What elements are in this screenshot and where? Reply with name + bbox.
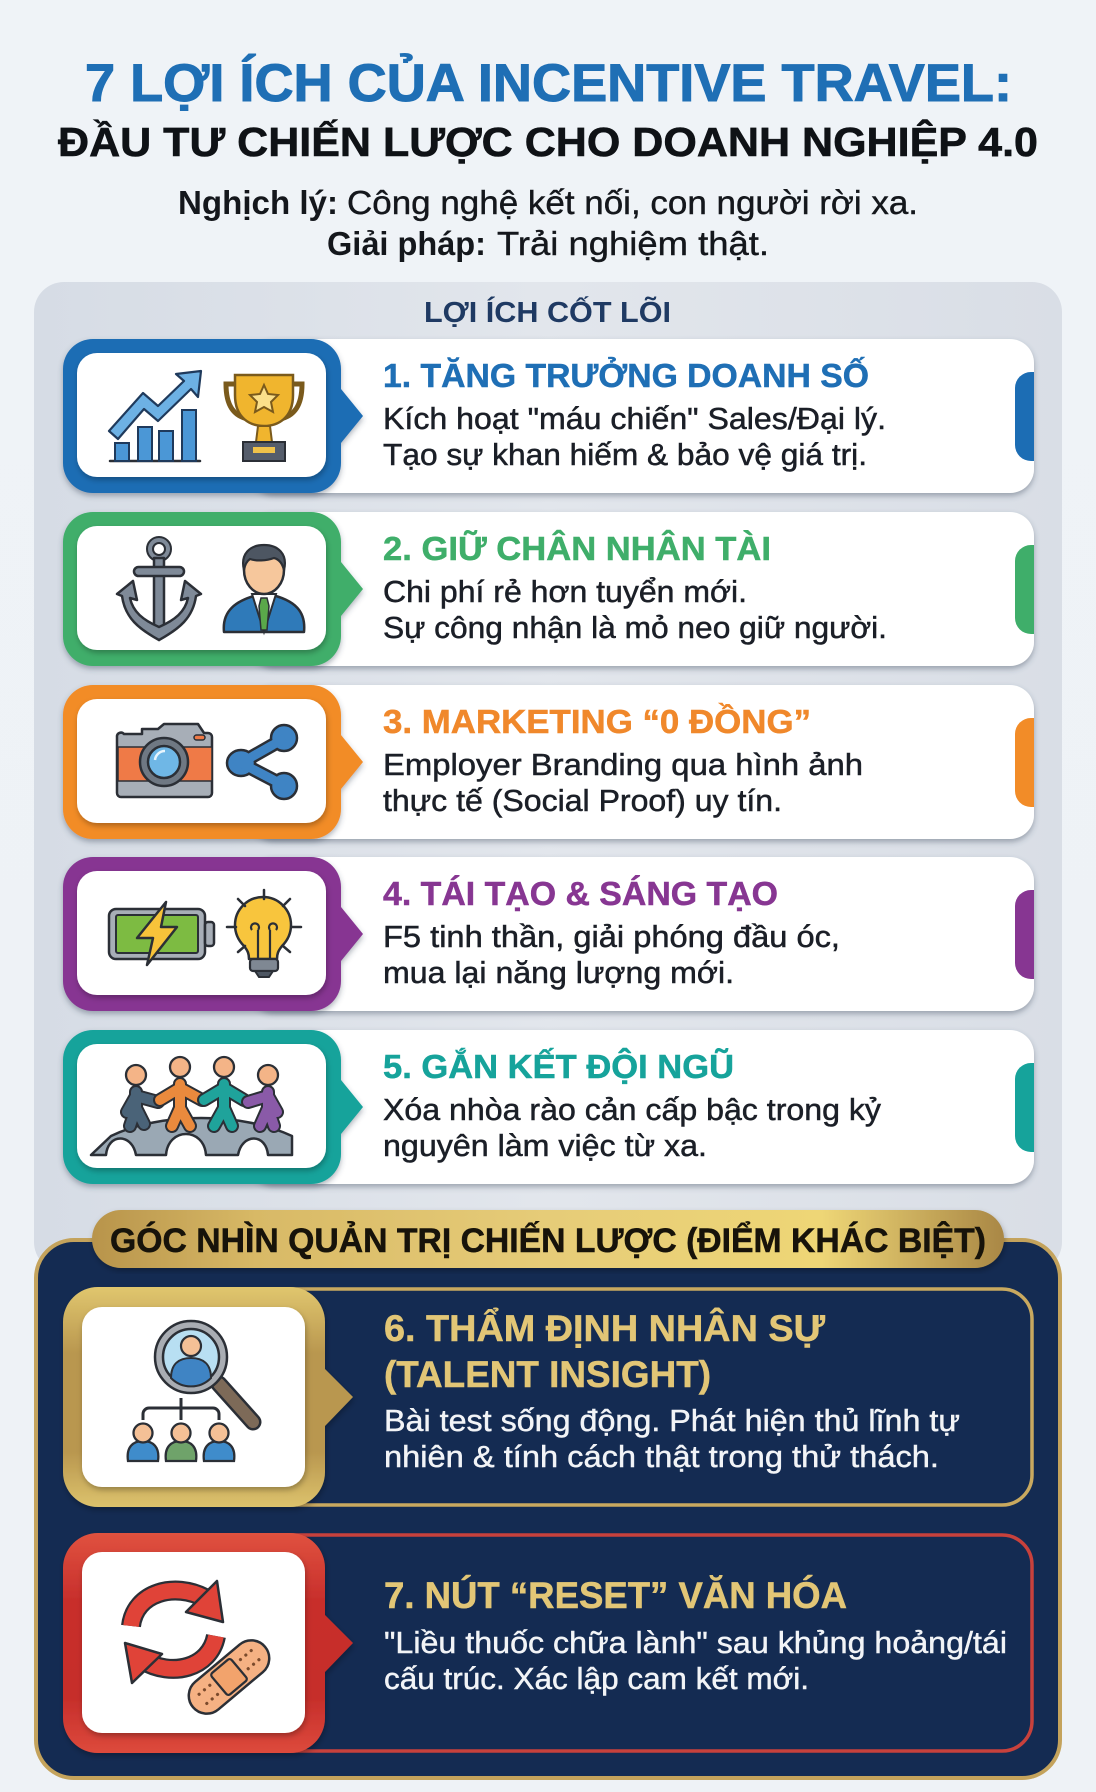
text: card 6: 6. THẨM ĐỊNH NHÂN SỰ bbox=[384, 1307, 825, 1349]
panel: strategic view bbox=[36, 1210, 1060, 1778]
text: card 3 bbox=[383, 703, 863, 818]
text: card 4: F5 tinh thần, giải phóng đầu óc, bbox=[383, 920, 840, 954]
card 2: talent retention bbox=[63, 512, 1034, 666]
text: card 3: thực tế (Social Proof) uy tín. bbox=[383, 784, 782, 818]
text: card 2: 2. GIỮ CHÂN NHÂN TÀI bbox=[383, 530, 771, 567]
text: card 7: 7. NÚT “RESET” VĂN HÓA bbox=[384, 1574, 847, 1616]
text: card 7 bbox=[384, 1574, 1007, 1696]
card 5: team bonding bbox=[63, 1030, 1034, 1184]
text: card 4: 4. TÁI TẠO & SÁNG TẠO bbox=[383, 875, 778, 912]
icon: battery bbox=[109, 902, 214, 965]
icon: magnifier over org chart bbox=[128, 1321, 253, 1461]
text: card 6: Bài test sống động. Phát hiện thủ lĩnh tự bbox=[384, 1404, 960, 1438]
text: card 5: 5. GẮN KẾT ĐỘI NGŨ bbox=[383, 1047, 734, 1085]
text: card 4: mua lại năng lượng mới. bbox=[383, 956, 734, 990]
icon: anchor bbox=[117, 540, 201, 640]
banner: strategic view heading bbox=[92, 1210, 1004, 1268]
card 4: renewal and creativity bbox=[63, 857, 1034, 1011]
icon: growth chart bbox=[109, 371, 201, 461]
title bbox=[58, 53, 1038, 165]
card 1: sales growth bbox=[63, 339, 1034, 493]
text: card 2: Chi phí rẻ hơn tuyển mới. bbox=[383, 575, 747, 609]
intro text: Nghịch lý: bbox=[178, 184, 338, 221]
intro text bbox=[178, 184, 918, 262]
text: card 1: Kích hoạt "máu chiến" Sales/Đại lý. bbox=[383, 402, 886, 436]
intro text: Công nghệ kết nối, con người rời xa. bbox=[347, 184, 918, 221]
text: card 3: Employer Branding qua hình ảnh bbox=[383, 748, 863, 782]
text: card 3: 3. MARKETING “0 ĐỒNG” bbox=[383, 703, 811, 740]
icon: trophy bbox=[226, 375, 302, 461]
text: card 4 bbox=[383, 875, 840, 990]
card 3: zero-cost marketing bbox=[63, 685, 1034, 839]
icon: camera bbox=[117, 724, 212, 797]
card 6: talent insight bbox=[63, 1287, 1032, 1507]
text: card 1: 1. TĂNG TRƯỞNG DOANH SỐ bbox=[383, 356, 869, 394]
text: card 7: "Liều thuốc chữa lành" sau khủng hoảng/tái bbox=[384, 1626, 1007, 1660]
text: card 2: Sự công nhận là mỏ neo giữ người. bbox=[383, 611, 887, 645]
text: card 6 bbox=[384, 1307, 960, 1474]
text: card 6: (TALENT INSIGHT) bbox=[384, 1354, 711, 1395]
banner: strategic view heading: GÓC NHÌN QUẢN TRỊ CHIẾN LƯỢC (ĐIỂM KHÁC BIỆT) bbox=[110, 1222, 986, 1260]
text: card 5: Xóa nhòa rào cản cấp bậc trong kỷ bbox=[383, 1093, 882, 1127]
text: card 1: Tạo sự khan hiếm & bảo vệ giá trị. bbox=[383, 438, 867, 472]
text: card 5 bbox=[383, 1047, 882, 1163]
icon: share bbox=[227, 725, 297, 799]
icon: light bulb bbox=[227, 890, 301, 977]
text: card 1 bbox=[383, 356, 886, 472]
icon: people on a bridge bbox=[91, 1057, 292, 1155]
intro text: Trải nghiệm thật. bbox=[497, 225, 769, 262]
title: ĐẦU TƯ CHIẾN LƯỢC CHO DOANH NGHIỆP 4.0 bbox=[58, 119, 1038, 165]
icon: businessman bbox=[224, 545, 304, 632]
heading: core benefits: LỢI ÍCH CỐT LÕI bbox=[424, 295, 671, 329]
title: 7 LỢI ÍCH CỦA INCENTIVE TRAVEL: bbox=[85, 53, 1012, 113]
panel: core benefits bbox=[34, 282, 1062, 1272]
text: card 2 bbox=[383, 530, 887, 645]
text: card 5: nguyên làm việc từ xa. bbox=[383, 1129, 707, 1163]
icon: reset arrows and bandage bbox=[125, 1581, 277, 1721]
text: card 6: nhiên & tính cách thật trong thử thách. bbox=[384, 1440, 939, 1474]
text: card 7: cấu trúc. Xác lập cam kết mới. bbox=[384, 1662, 809, 1696]
card 7: culture reset bbox=[63, 1533, 1032, 1753]
intro text: Giải pháp: bbox=[327, 225, 486, 262]
